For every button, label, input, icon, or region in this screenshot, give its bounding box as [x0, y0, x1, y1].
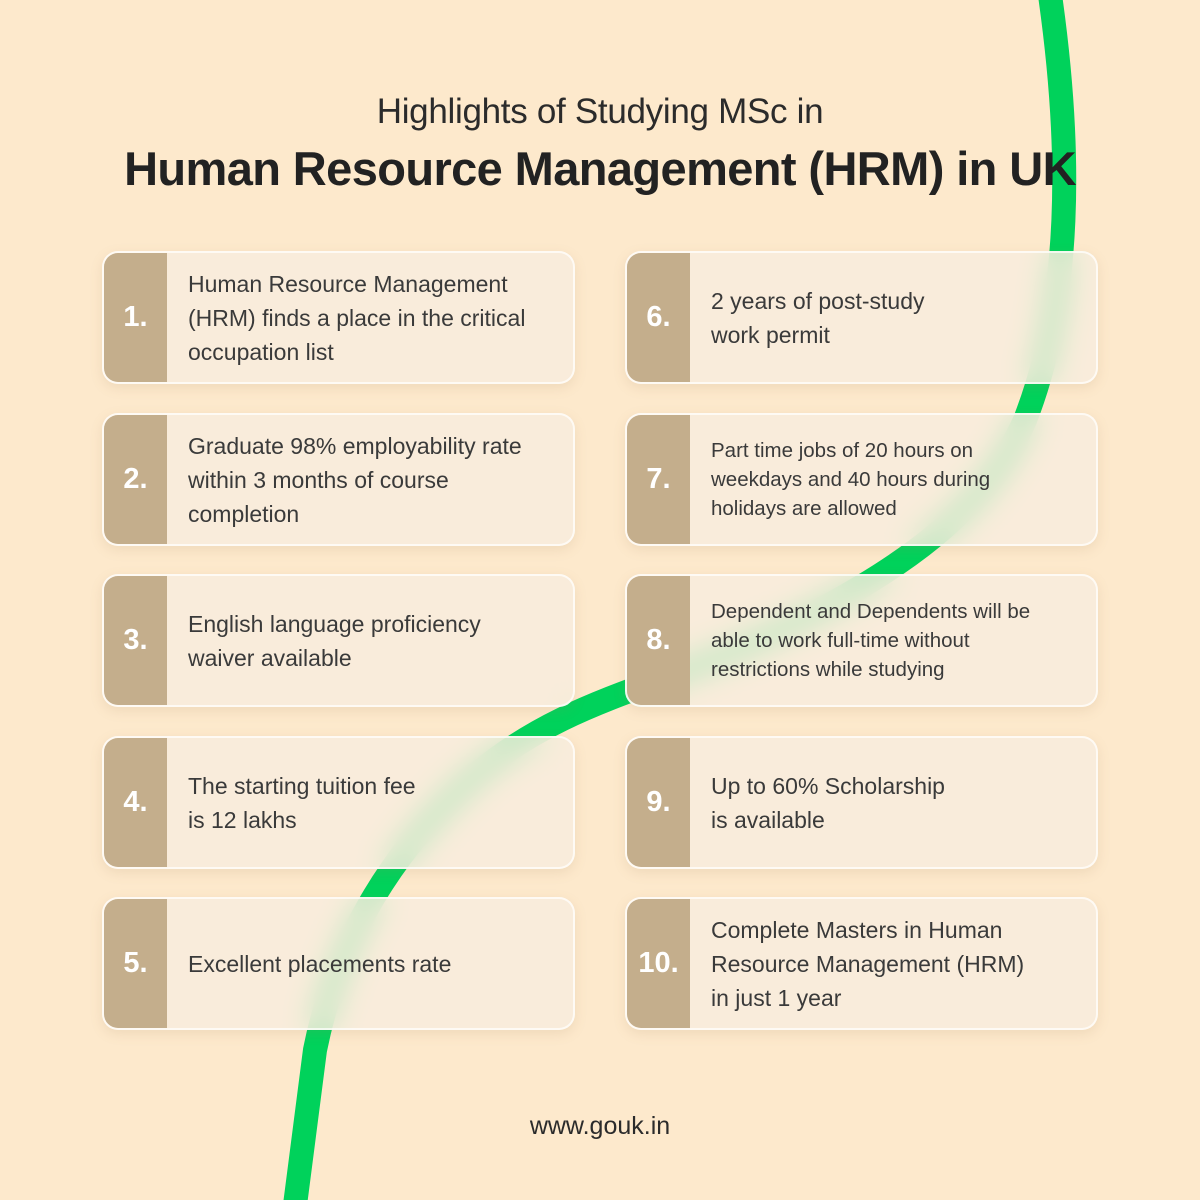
card 5	[102, 897, 575, 1030]
card 8	[625, 574, 1098, 707]
card 2: Graduate 98% employability rate within 3 months of course completion	[188, 432, 522, 526]
card 8: restrictions while studying	[711, 658, 945, 681]
subtitle heading: Human Resource Management (HRM) in UK	[124, 142, 1076, 195]
card 7: holidays are allowed	[711, 497, 897, 520]
card 10: 10.	[638, 947, 679, 979]
card 3: English language proficiency	[188, 610, 481, 636]
footer url: www.gouk.in	[530, 1112, 670, 1140]
card 3	[102, 574, 575, 707]
card 3: 3.	[123, 624, 148, 656]
card 7	[625, 413, 1098, 546]
card 7: 7.	[646, 463, 671, 495]
card 4: The starting tuition fee	[188, 772, 416, 798]
card 6: work permit	[711, 322, 830, 348]
card 4: is 12 lakhs	[188, 806, 297, 832]
card 8: Dependent and Dependents will be	[711, 600, 1030, 623]
card 6: 2 years of post-study	[711, 288, 924, 314]
card 9: is available	[711, 806, 825, 832]
card 10: Complete Masters in Human	[711, 916, 1002, 942]
card 6	[625, 251, 1098, 384]
card 7: weekdays and 40 hours during	[711, 468, 990, 491]
card 3: waiver available	[188, 644, 352, 670]
card 4	[102, 736, 575, 869]
card 5: 5.	[123, 947, 148, 979]
card 1: 1.	[123, 301, 148, 333]
card 9: 9.	[646, 786, 671, 818]
card 1	[102, 251, 575, 384]
card 7: Part time jobs of 20 hours on	[711, 439, 973, 462]
card 2	[102, 413, 575, 546]
card 10	[625, 897, 1098, 1030]
card 5: Excellent placements rate	[188, 950, 451, 976]
card 4: 4.	[123, 786, 148, 818]
card 6: 6.	[646, 301, 671, 333]
card 9: Up to 60% Scholarship	[711, 772, 945, 798]
card 9	[625, 736, 1098, 869]
card 10: in just 1 year	[711, 984, 841, 1010]
card 8: 8.	[646, 624, 671, 656]
card 8: able to work full-time without	[711, 629, 970, 652]
card 2: 2.	[123, 463, 148, 495]
title: Highlights of Studying MSc in	[377, 92, 823, 131]
card 10: Resource Management (HRM)	[711, 950, 1024, 976]
card 1: Human Resource Management (HRM) finds a place in the critical occupation list	[188, 270, 525, 364]
